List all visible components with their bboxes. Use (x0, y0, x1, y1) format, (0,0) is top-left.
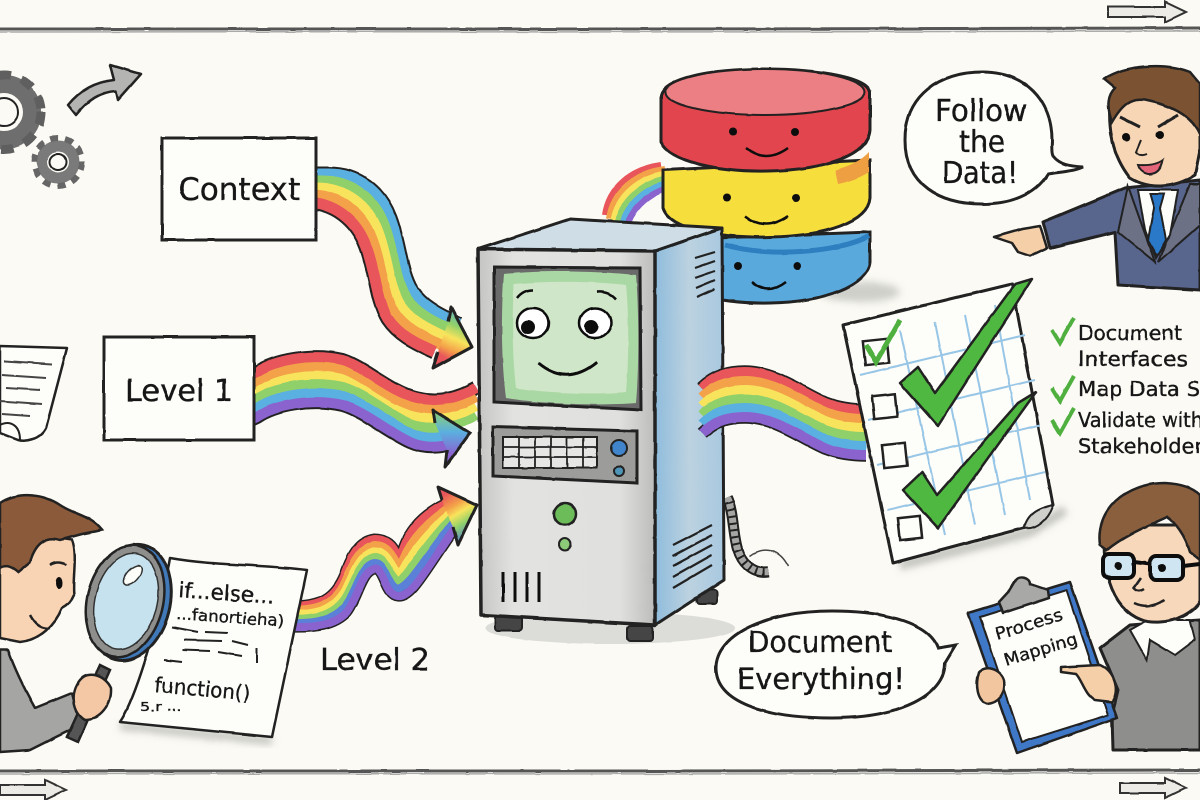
screen face: smile (538, 362, 597, 375)
server: control panel (493, 427, 637, 483)
glasses man: head (1105, 525, 1200, 622)
box: Context: Context (178, 172, 300, 208)
man: pointing hand (994, 226, 1047, 256)
clipboard paper (980, 590, 1108, 742)
man: head (1110, 85, 1200, 186)
large check marks (900, 279, 1036, 528)
server: feet (495, 590, 717, 641)
code text: 5.r ... (140, 700, 182, 714)
person: pointing man in suit (994, 66, 1200, 290)
database: yellow layer (663, 152, 870, 237)
clipboard text (993, 605, 1080, 671)
speech bubble: Follow the Data: the (959, 125, 1005, 160)
speech bubble: Follow the Data: Follow (935, 94, 1027, 129)
code text (140, 578, 285, 714)
server: floor shadow (485, 612, 735, 644)
speech bubble: Document Everything: Everything! (737, 662, 905, 696)
paper corner curl (1024, 505, 1053, 528)
glasses man: sweater body (1100, 620, 1200, 750)
inspector: hair (0, 495, 102, 572)
box: Level 1: Level 1 (125, 374, 233, 409)
icon: small gear (34, 138, 82, 186)
rainbow arrow: Level 1 to server (240, 357, 476, 467)
server: front face (478, 249, 655, 625)
database stack (661, 69, 870, 303)
arrow: bottom left (0, 780, 66, 800)
arrow: curved gray (68, 65, 141, 115)
server: top face (478, 219, 722, 251)
man: suit body (1043, 180, 1200, 290)
speech bubble: Document Everything: Document (748, 625, 892, 659)
magnifying glass lens (74, 535, 183, 669)
checklist paper (843, 279, 1053, 563)
screen face: eyes and brows (517, 290, 616, 338)
person: man with magnifying glass (0, 495, 183, 752)
server: screen (494, 267, 641, 410)
clipboard clip (999, 577, 1049, 613)
checklist item text: Document (1078, 321, 1182, 345)
paper sheet (843, 284, 1053, 563)
rainbow arrow: Context to server (278, 174, 472, 368)
icon: large gear (0, 75, 41, 149)
speech bubble: Follow the Data (905, 72, 1083, 204)
glasses man: collar (1130, 620, 1195, 660)
box: Context (162, 138, 316, 240)
checklist item text: Stakeholder (1078, 434, 1200, 458)
checkboxes (863, 339, 922, 540)
speech bubble: Follow the Data: Data! (942, 156, 1018, 191)
checklist item text (1078, 321, 1200, 458)
inspector: head (0, 530, 75, 642)
man: face (1120, 115, 1178, 174)
man: hair (1104, 66, 1200, 135)
tick: validate (1052, 408, 1074, 433)
arrow: top right (1108, 2, 1186, 22)
code text: function() (154, 673, 251, 705)
clipboard: Process Mapping (968, 577, 1117, 753)
speech bubble: Document Everything (716, 611, 956, 718)
pointing hand (1061, 665, 1116, 702)
code document (120, 558, 307, 737)
server: side face (655, 228, 724, 625)
icon: document scroll (0, 346, 67, 441)
clipboard text: Mapping (1002, 629, 1080, 671)
box: Level 1 (104, 337, 254, 440)
rainbow: server to checklist (702, 372, 866, 455)
code paper (120, 558, 307, 737)
server: side vents (673, 252, 715, 588)
code text: if...else... (178, 578, 275, 609)
bottom border line (0, 770, 1200, 774)
server: green buttons (554, 503, 576, 550)
server: cable (727, 497, 788, 572)
database: red layer (661, 69, 870, 171)
checklist text (1052, 318, 1200, 458)
checklist item text: Interfaces (1078, 347, 1188, 371)
person: man with glasses (1099, 483, 1200, 750)
code squiggles (164, 627, 257, 663)
rainbow: to database (605, 165, 681, 235)
glasses man: nose and smile (1134, 578, 1164, 606)
tick: document interfaces (1052, 318, 1074, 343)
clipboard frame (968, 582, 1117, 753)
inspector: body (0, 650, 80, 752)
code text: ...fanortieha) (176, 604, 285, 631)
glasses man: hair (1099, 483, 1200, 560)
top border line (0, 28, 1200, 32)
label: Level 2: Level 2 (320, 643, 430, 678)
glasses (1103, 554, 1200, 580)
checklist item text: Map Data S (1078, 377, 1200, 401)
small check mark (866, 320, 900, 362)
database: blue layer (664, 232, 870, 303)
magnifying glass handle (67, 665, 110, 742)
rainbow arrow: Level 2 to server (290, 487, 477, 627)
man: lapels (1118, 184, 1200, 262)
paper blue grid (860, 305, 1045, 535)
man: shirt and tie (1138, 190, 1178, 258)
inspector: hand (74, 675, 111, 720)
tick: map data (1052, 376, 1074, 401)
inspector: face (30, 562, 66, 628)
server computer (478, 219, 788, 644)
clipboard text: Process (993, 605, 1066, 645)
arrow: bottom right (1120, 778, 1186, 798)
left hand (977, 668, 1004, 704)
server: front vents (503, 572, 539, 602)
